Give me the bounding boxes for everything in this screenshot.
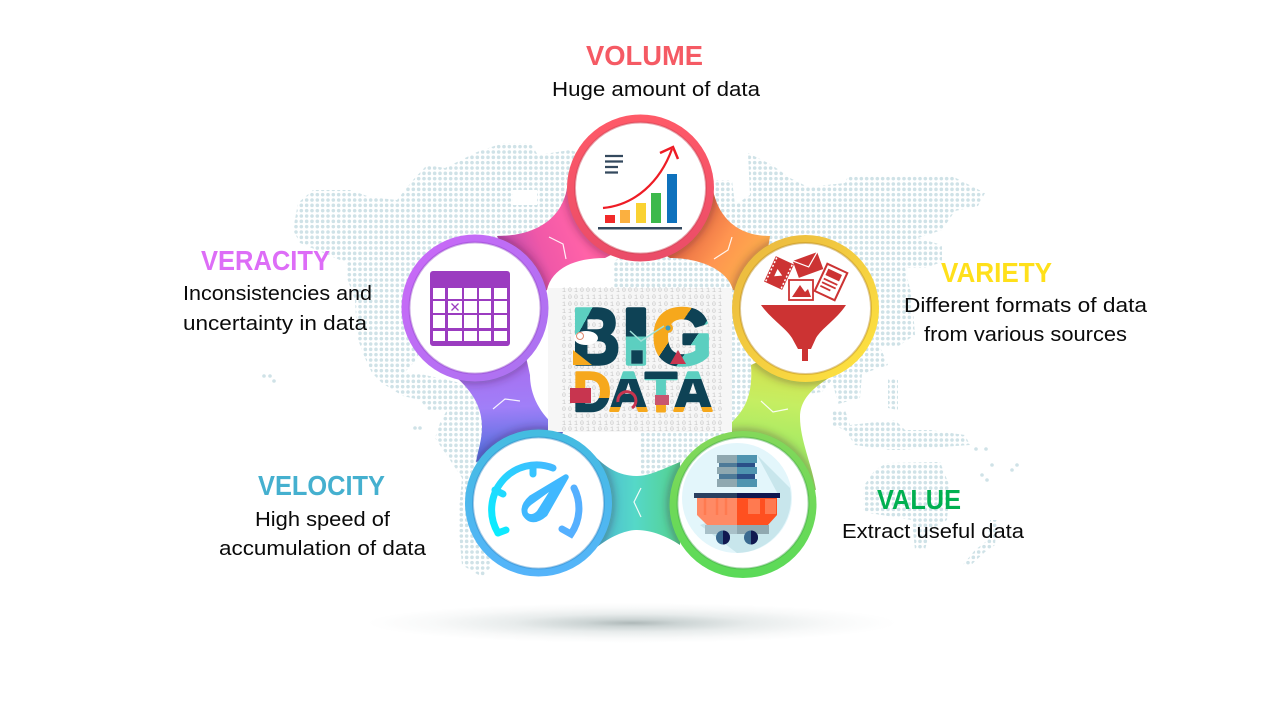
- binary background: 1 0 1 1 0 1 1 0 0 1 0 1 1 0 1 1 1 0 0 1 1 1 0 1 0 1 1: [562, 413, 722, 420]
- floor shadow: [367, 603, 897, 643]
- word: DATA: D: [573, 360, 611, 423]
- word: BIG: B: [572, 292, 620, 381]
- center image: big data: [548, 287, 732, 433]
- word: BIG: I: [621, 292, 651, 381]
- binary background: 0 0 1 0 1 1 0 0 1 1 1 1 0 1 1 1 1 1 0 1 0 1 0 1 0 1 1: [562, 426, 722, 433]
- label: velocity: High speed of: [255, 509, 390, 531]
- node: velocity: [465, 430, 612, 576]
- binary background: 1 0 1 1 0 0 1 0 1 1 0 0 1 0 1 0 0 1 1 0 1 0 1 0 1 1 1: [562, 322, 722, 329]
- binary background: 1 0 0 0 1 0 0 0 1 0 1 1 0 1 1 0 1 0 1 1 1 0 1 0 1 0 1: [562, 301, 722, 308]
- connector: volume to variety: [640, 190, 770, 300]
- binary background: 1 0 1 1 0 0 1 1 0 1 0 1 0 0 1 1 0 1 1 0 0 1 0 1 1 0 0: [562, 385, 722, 392]
- label: volume: [552, 40, 761, 101]
- binary background: 0 0 1 1 0 1 1 0 1 0 1 0 1 0 0 1 1 0 1 1 0 1 0 1 0 1 0: [562, 406, 722, 413]
- binary background: 0 1 0 1 1 0 1 1 0 1 0 0 1 0 1 1 0 0 1 1 0 1 0 0 1 1 1: [562, 357, 722, 364]
- word: DATA: [573, 360, 713, 423]
- label: value: Extract useful data: [842, 521, 1025, 543]
- binary background: 1 0 1 0 0 0 1 0 0 1 0 0 0 1 0 0 0 0 1 0 0 1 1 1 1 1 1: [562, 287, 722, 294]
- label: volume: VOLUME: [586, 40, 703, 71]
- connector: variety to value: [730, 340, 832, 490]
- binary background: 1 1 0 1 0 1 1 0 0 1 0 1 0 1 1 0 0 1 0 1 1 0 1 1 0 0 1: [562, 308, 722, 315]
- binary background: 0 0 1 0 1 1 0 1 0 1 1 0 0 1 1 0 1 0 1 0 0 1 1 0 1 0 1: [562, 343, 722, 350]
- icon: funnel with media files: [761, 252, 847, 361]
- node: variety: [732, 235, 879, 382]
- label: variety: [904, 257, 1148, 346]
- binary background: 1 0 1 1 0 1 0 0 1 0 1 1 0 1 0 1 0 1 1 0 1 0 1 1 0 1 0: [562, 350, 722, 357]
- word: BIG: G: [652, 292, 712, 381]
- connector: velocity to veracity: [440, 330, 563, 462]
- label: variety: from various sources: [924, 324, 1127, 346]
- label: volume: Huge amount of data: [552, 79, 761, 101]
- dotted world map: [262, 143, 1019, 577]
- label: variety: VARIETY: [941, 257, 1052, 288]
- binary background: 1 1 0 1 0 1 1 0 1 0 0 1 0 1 0 1 1 0 1 0 1 1 0 1 0 1 1: [562, 371, 722, 378]
- label: veracity: Inconsistencies and: [183, 283, 372, 305]
- ring connectors network: [440, 180, 832, 550]
- label: velocity: VELOCITY: [258, 470, 385, 501]
- icon: mine cart with data stack: [682, 443, 792, 553]
- label: value: VALUE: [877, 484, 961, 515]
- word: DATA: T: [645, 360, 677, 423]
- label: variety: Different formats of data: [904, 295, 1148, 317]
- binary background: 0 1 0 0 1 1 0 1 0 0 1 1 0 1 0 1 1 0 0 1 0 1 0 1 1 0 0: [562, 329, 722, 336]
- binary background: 1 0 0 1 1 1 1 1 1 1 1 0 1 0 1 0 1 0 1 1 0 1 0 0 0 1 1: [562, 294, 722, 301]
- binary background: 0 1 1 0 0 1 0 1 1 0 1 0 0 1 0 1 1 0 1 0 1 1 0 0 1 0 1: [562, 315, 722, 322]
- connector: volume to veracity: [497, 180, 640, 300]
- node: volume: [567, 114, 714, 262]
- binary background: 1 1 0 1 0 1 0 0 1 1 0 1 0 1 1 0 1 0 0 1 0 1 1 0 1 0 1: [562, 399, 722, 406]
- binary background: [562, 287, 722, 433]
- label: value: [842, 484, 1025, 543]
- label: veracity: uncertainty in data: [183, 313, 368, 335]
- word: DATA: A: [609, 360, 648, 423]
- connector shading under nodes: [458, 189, 828, 546]
- label: velocity: accumulation of data: [219, 538, 427, 560]
- binary background: 0 1 1 0 1 0 0 1 0 1 1 0 1 0 1 0 0 1 0 1 1 0 1 0 1 0 1: [562, 378, 722, 385]
- word: DATA: A: [673, 360, 713, 423]
- word: BIG: [572, 292, 712, 381]
- connector: value to velocity: [590, 453, 680, 550]
- binary background: 0 1 0 0 1 1 0 1 1 0 1 0 1 1 0 0 1 0 1 0 1 1 0 0 1 1 1: [562, 392, 722, 399]
- label: velocity: [219, 470, 427, 560]
- icon: calendar: [430, 271, 510, 346]
- chevrons: [493, 237, 788, 517]
- lettering details: [570, 323, 686, 408]
- label: veracity: VERACITY: [201, 245, 330, 276]
- node: value: [670, 431, 816, 578]
- icon: rising bar chart: [598, 147, 682, 230]
- binary background: 1 1 0 1 0 0 1 0 1 1 0 1 1 0 0 1 0 1 0 1 1 0 1 0 0 1 1: [562, 336, 722, 343]
- label: veracity: [183, 245, 372, 335]
- binary background: 1 0 0 0 1 0 1 0 0 1 1 0 1 1 1 0 0 1 1 0 0 0 1 1 1 0 0: [562, 364, 722, 371]
- icon: speedometer: [492, 465, 579, 534]
- node: veracity: [402, 234, 548, 382]
- binary background: 1 1 1 0 1 0 1 1 0 1 0 1 0 1 0 1 0 0 0 1 0 1 1 0 1 0 0: [562, 420, 722, 427]
